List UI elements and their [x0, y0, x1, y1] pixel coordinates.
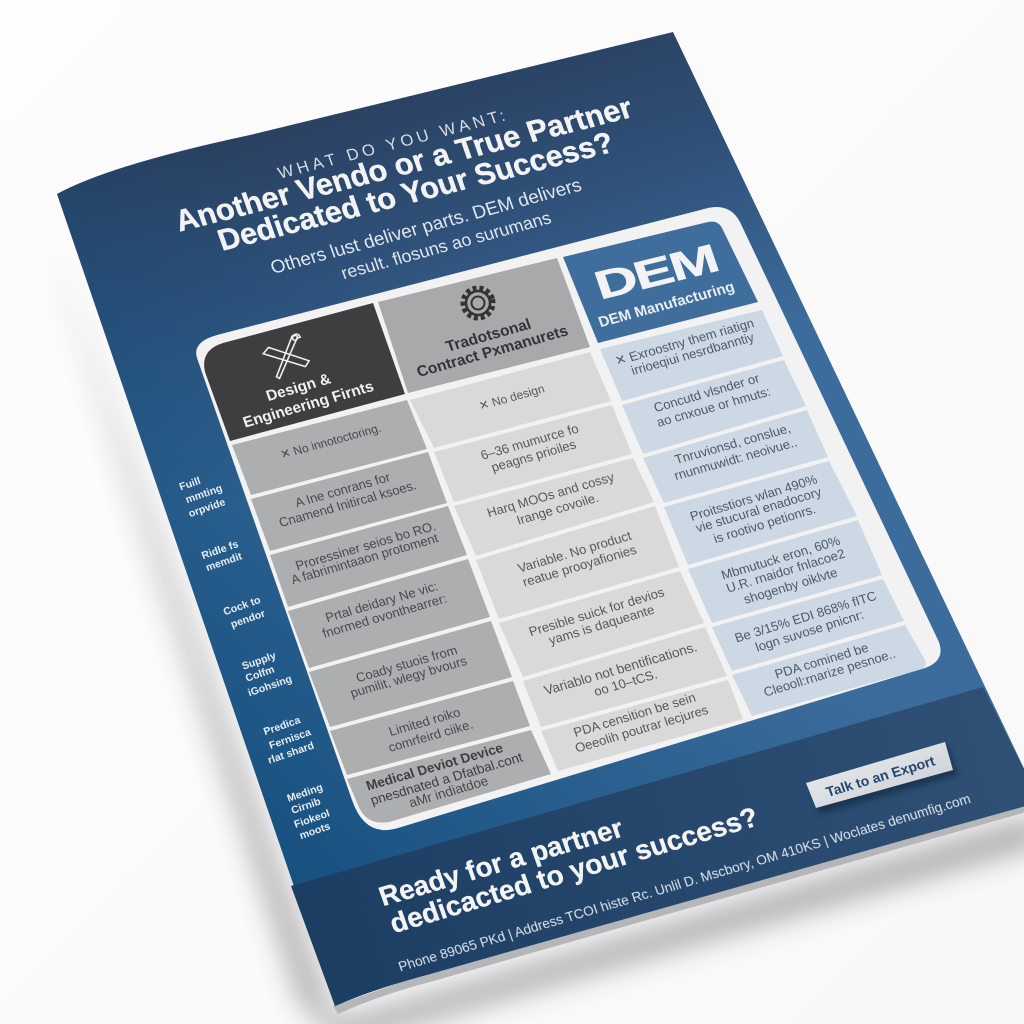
row labels: Fiokeol: [293, 807, 332, 831]
column three text: vie stucural enadocory: [694, 484, 824, 535]
row labels: moots: [298, 820, 332, 842]
column three text: ✕ Exroostny them riatign: [613, 315, 756, 368]
column header: design firms: [204, 303, 405, 441]
column three text: Cleooll:rnarize pesnoe..: [762, 646, 898, 700]
row labels: iGohsing: [246, 673, 294, 699]
contact line: Phone 89065 PKd | Address TCOI histe Rc. Unlil D. Mscbory, OM 410KS | Woclates denumfig.com: [396, 791, 973, 974]
column header: DEM: [563, 222, 758, 343]
column three text: U.R. rnaidor fnlacoe2: [724, 546, 847, 596]
brochure shadow: [50, 240, 1024, 1024]
row labels: Meding: [286, 781, 324, 805]
comparison panel: [196, 207, 941, 830]
icon: crossed tools: [261, 333, 312, 381]
column three text: PDA comined be: [773, 640, 870, 682]
column one text: Cnamend Initircal ksoes.: [277, 477, 418, 530]
column header: design firms: Engineering Firnts: [241, 378, 376, 431]
row labels: Cirnib: [290, 796, 322, 817]
column one text: A fabrimintaaon protoment: [289, 530, 441, 587]
icon: gear: [460, 285, 496, 321]
row labels: Fuill: [178, 475, 202, 493]
column one text: fnormed ovonthearrer:: [320, 591, 449, 641]
column two cells: [410, 352, 743, 771]
column two text: yams is daqueante: [547, 602, 656, 648]
subtitle line one: Others lust deliver parts. DEM delivers: [268, 174, 584, 278]
row labels: rlat shard: [266, 740, 316, 767]
column one text: [277, 421, 525, 810]
row labels: orpvide: [187, 496, 227, 520]
row labels: Fernisca: [268, 726, 313, 752]
heading block: [171, 91, 637, 283]
column three text: Proitsstiors wlan 490%: [688, 472, 819, 524]
label: DEM Manufacturing: [596, 278, 737, 331]
column three text: Be 3/15% EDI 868% fITC: [733, 588, 878, 645]
row labels: Ridle fs: [200, 538, 240, 562]
label: Design &: [264, 371, 333, 405]
row labels: memdit: [204, 550, 244, 574]
column one text: Proressiner seios bo RO.: [293, 518, 438, 573]
button: talk to an expert: [806, 742, 958, 814]
column one text: aMr indiatdoe: [407, 773, 490, 810]
footer call to action: Ready for a partner: [375, 812, 627, 912]
column two text: ✕ No design: [477, 382, 546, 413]
title line one: Another Vendo or a True Partner: [171, 91, 637, 238]
column one text: Prtal deidary Ne vic:: [323, 578, 440, 625]
column one text: pumilit, wlegy bvours: [348, 653, 469, 700]
row labels: [178, 475, 332, 842]
column two text: 6–36 mumurce fo: [479, 421, 581, 463]
column two text: Variable. No product: [516, 528, 634, 576]
column three cells: [600, 310, 926, 716]
column two text: PDA censition be sein: [571, 690, 698, 740]
title line two: Dedicated to Your Success?: [214, 127, 618, 258]
column three text: rnunmuwidt: neoivue..: [672, 435, 799, 483]
column one text: Medical Deviot Device: [364, 740, 505, 793]
column three text: Concutd vlsnder or: [652, 370, 762, 415]
footer call to action: dedicacted to your success?: [386, 801, 762, 939]
column two text: oo 10–tCS.: [592, 667, 659, 699]
column three text: Mbmutuck eron, 60%: [719, 533, 842, 583]
column three text: shogenby oiklvte: [742, 565, 839, 607]
column two text: Irange covoile.: [514, 490, 601, 528]
column three text: irrioeqiui nesrdbanntiy: [629, 329, 756, 378]
column three text: [613, 315, 898, 700]
column two text: Harq MOOs and cossy: [485, 469, 617, 520]
row labels: mmting: [184, 482, 224, 506]
row labels: Colfm: [244, 664, 276, 685]
column two text: Variablo not bentifications.: [542, 640, 699, 698]
column two text: [477, 382, 711, 755]
row labels: pendor: [229, 608, 267, 631]
column three text: is rootivo petionrs.: [711, 501, 818, 546]
footer band: [291, 687, 1024, 1006]
column three text: ao cnxoue or hmuts:: [655, 384, 772, 430]
row labels: Supply: [240, 650, 278, 673]
logo: DEM: DEM: [588, 236, 723, 308]
button: talk to an expert: Talk to an Export: [824, 753, 937, 800]
label: Tradotsonal: [444, 316, 533, 356]
column three text: Tnruvionsd, conslue,: [673, 421, 792, 467]
row labels: Predica: [262, 714, 302, 738]
column header: traditional contract manufacturers: [378, 258, 590, 393]
row labels: Cock to: [222, 594, 262, 618]
column one cells: [232, 400, 551, 823]
column three text: logn suvose pnicnr:: [753, 607, 866, 655]
column two text: reatue prooyafionies: [521, 542, 639, 590]
column two text: peagns prioiles: [489, 437, 578, 475]
eyebrow: WHAT DO YOU WANT:: [275, 106, 511, 183]
column one text: Coady stuois from: [354, 642, 459, 685]
column one text: ✕ No innotoctoring.: [278, 421, 383, 462]
column header: traditional contract manufacturers: Contract Pxmanurets: [415, 323, 571, 381]
column one text: pnesdnated a Dfatbal.cont: [368, 750, 525, 808]
subtitle line two: result. flosuns ao surumans: [338, 208, 554, 283]
column one text: Limited roiko: [387, 705, 462, 739]
column one text: A Ine conrans for: [293, 469, 393, 510]
column one text: comrfeird ciike.: [386, 717, 475, 755]
column two text: Oeeolih poutrar lecjures: [573, 702, 711, 755]
column two text: Presible suick for devios: [527, 584, 667, 639]
brochure page edge: [333, 800, 1024, 1014]
